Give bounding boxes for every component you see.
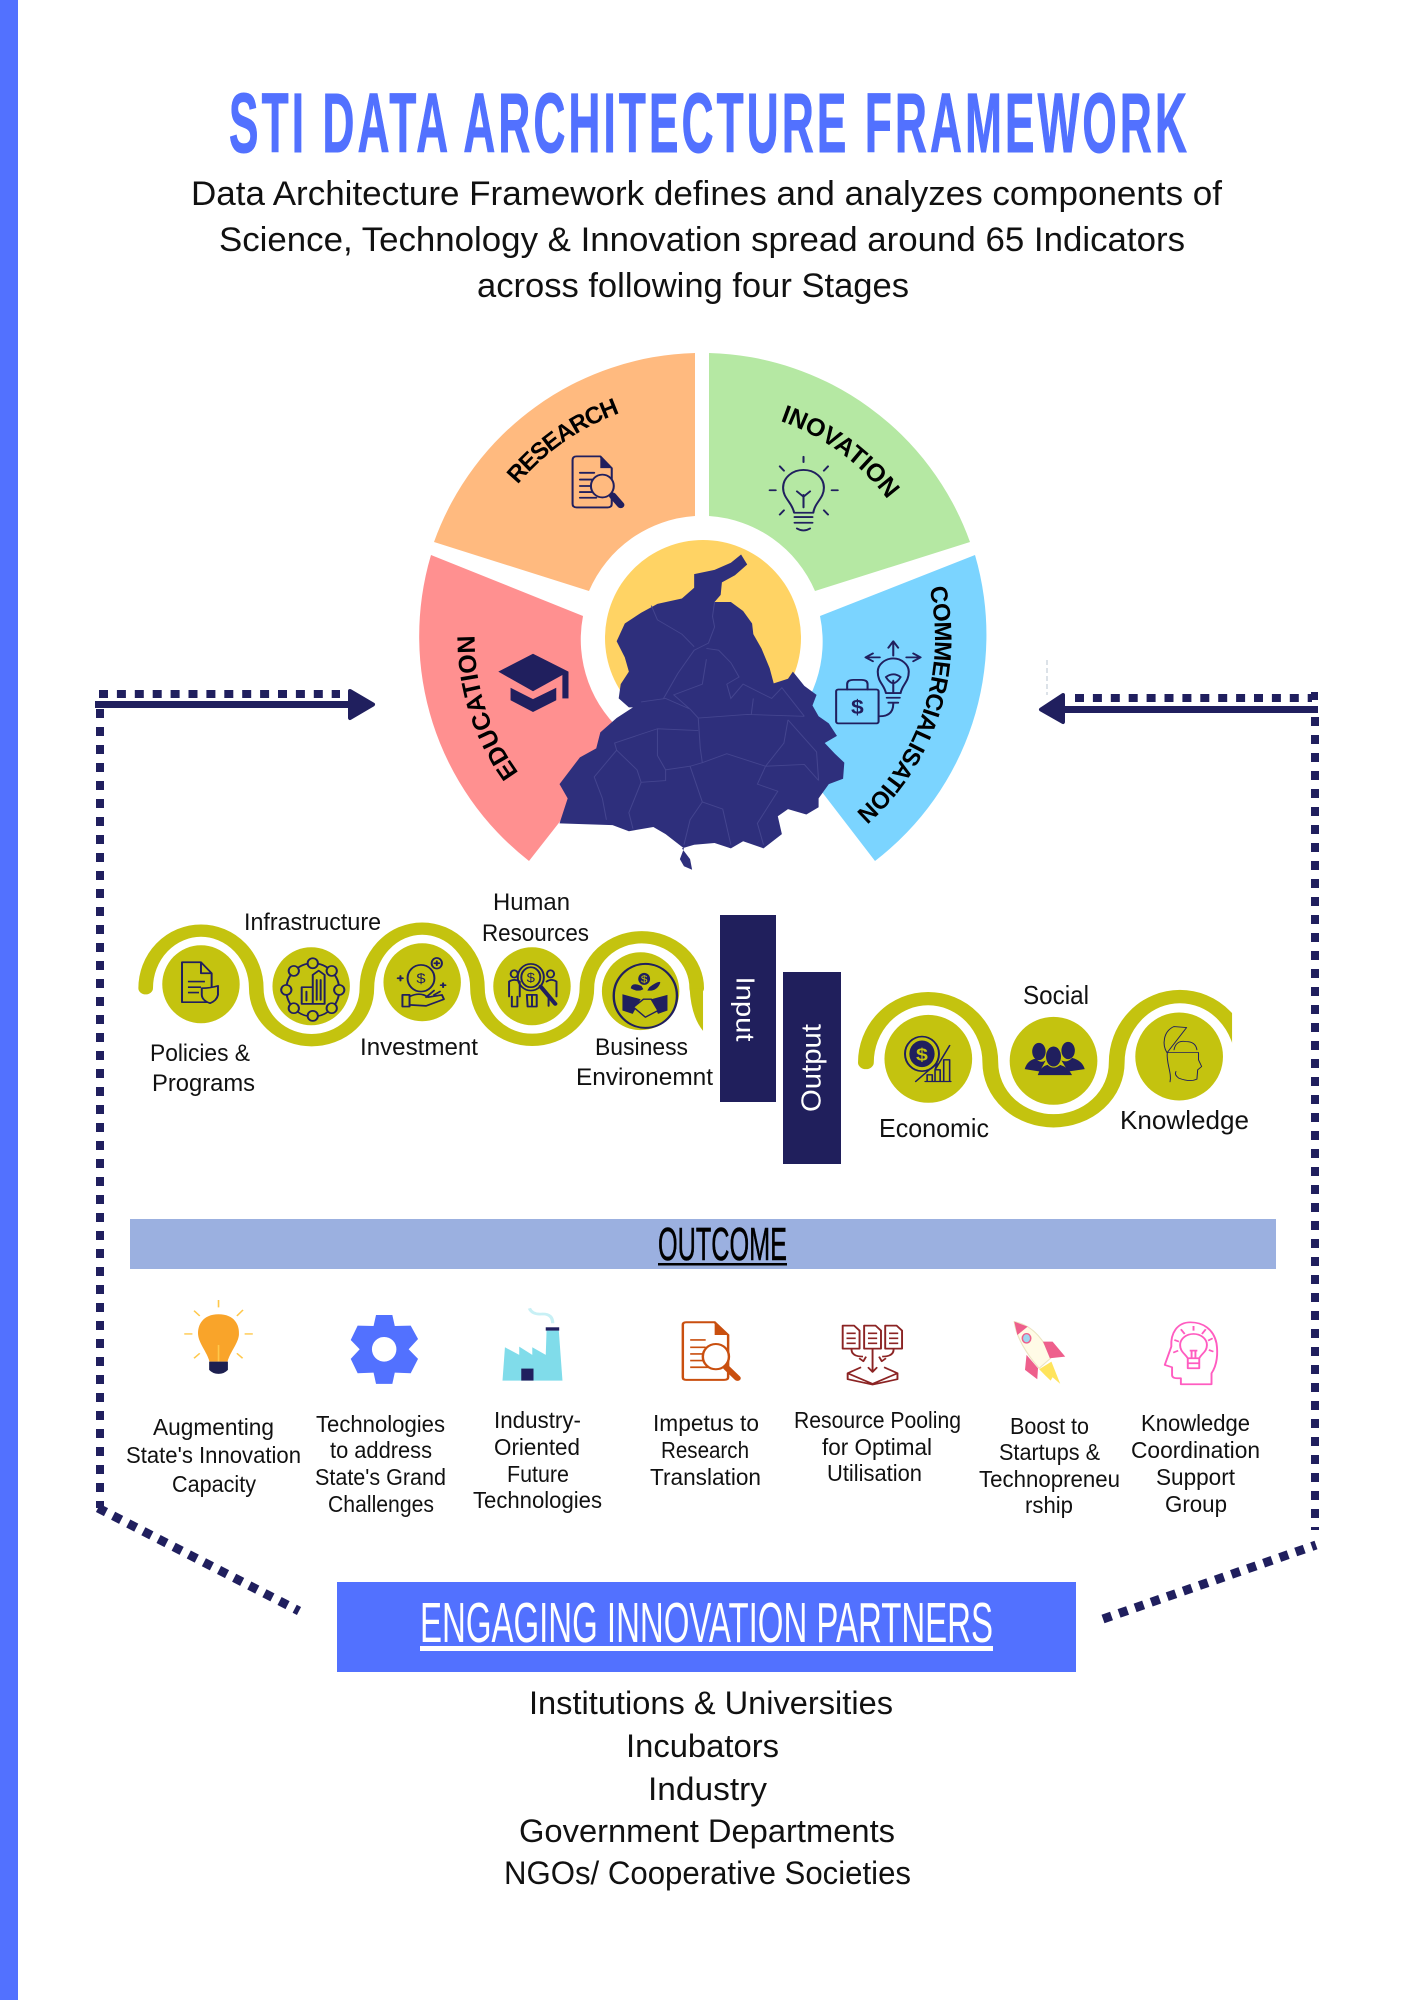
outcome: startups (979, 1413, 1120, 1518)
segment: commercialisation (779, 555, 986, 861)
outcome: industry-oriented technologies: Future (507, 1461, 569, 1487)
segment: research (434, 353, 695, 591)
outcome icon: knowledge head (1165, 1322, 1217, 1384)
partners list: Institutions & Universities (529, 1685, 893, 1721)
label: research: RESEARCH (506, 398, 618, 484)
circle: investment: $ (416, 971, 426, 987)
centre circle (605, 540, 801, 736)
output snake: wave and circles (866, 997, 1243, 1121)
outcome: technologies for challenges: State's Grand (315, 1464, 446, 1490)
input labels (150, 889, 713, 1097)
label: education: EDUCATION (457, 637, 518, 782)
icon: commercialisation briefcase and bulb (836, 641, 921, 723)
circle: investment (383, 943, 461, 1021)
outcome: technologies for challenges: Challenges (328, 1491, 434, 1517)
input tab (720, 915, 776, 1102)
outcome: technologies for challenges: to address (330, 1437, 432, 1463)
output labels (879, 980, 1249, 1143)
outcome: resource pooling: for Optimal (822, 1434, 932, 1460)
subtitle: Data Architecture Framework defines and analyzes components of (191, 175, 1223, 213)
outcome: resource pooling (794, 1407, 961, 1486)
outcome: research translation: Impetus to (653, 1410, 759, 1436)
output labels: Knowledge (1120, 1105, 1249, 1135)
outcome: knowledge coordination: Knowledge (1141, 1410, 1250, 1436)
outcome: resource pooling: Resource Pooling (794, 1407, 961, 1433)
outcome icon: gear (351, 1315, 418, 1384)
outcome icon: research document (683, 1322, 738, 1380)
circle: business environment (602, 952, 679, 1030)
outcome: industry-oriented technologies: Technologies (473, 1487, 602, 1513)
label: innovation: INOVATION (782, 405, 900, 498)
outcome: industry-oriented technologies (473, 1407, 602, 1513)
outcome icon: factory (502, 1308, 562, 1381)
left dotted connector with arrow (95, 691, 373, 1611)
outcome: knowledge coordination: Support (1156, 1464, 1236, 1490)
partners list: NGOs/ Cooperative Societies (504, 1855, 911, 1891)
outcome: startups: rship (1025, 1492, 1073, 1518)
input tab: Input (731, 976, 761, 1042)
outcome: research translation: Translation (650, 1464, 761, 1490)
outcome icon: resource pooling (843, 1326, 902, 1385)
outcome: research translation: Research (661, 1437, 749, 1463)
input labels: Resources (482, 920, 589, 947)
subtitle (191, 175, 1223, 305)
circle: infrastructure (272, 947, 350, 1025)
outcome: augmenting capacity: Augmenting (153, 1414, 274, 1440)
input labels: Business (595, 1034, 688, 1061)
input labels: Investment (360, 1034, 478, 1061)
input labels: Programs (152, 1070, 255, 1097)
outcome icon: rocket (1014, 1322, 1065, 1384)
partners banner (337, 1582, 1076, 1672)
input labels: Human (493, 889, 570, 916)
subtitle: across following four Stages (477, 267, 909, 305)
input labels: Environemnt (576, 1064, 713, 1091)
partners banner: ENGAGING INNOVATION PARTNERS (420, 1591, 993, 1655)
output labels: Economic (879, 1113, 989, 1143)
circle: human resources (493, 947, 571, 1025)
outcome: industry-oriented technologies: Oriented (494, 1434, 580, 1460)
outcome: startups: Startups & (999, 1439, 1100, 1465)
output labels: Social (1023, 980, 1089, 1010)
partners list: Government Departments (519, 1813, 895, 1849)
circle: economic (884, 1015, 972, 1103)
subtitle: Science, Technology & Innovation spread around 65 Indicators (219, 221, 1185, 259)
partners list: Incubators (626, 1728, 779, 1764)
label: commercialisation: COMMERCIALISATION (857, 586, 952, 824)
circle: policies (162, 945, 240, 1023)
outcome band: OUTCOME (658, 1218, 787, 1270)
output tab: Output (795, 1024, 826, 1112)
left accent bar (0, 0, 18, 2000)
circle: social (1010, 1017, 1097, 1105)
wave (866, 997, 1243, 1121)
wheel: four stages (419, 353, 986, 870)
outcome: startups: Boost to (1010, 1413, 1089, 1439)
output tab (783, 972, 841, 1164)
input snake: wave and circles (146, 929, 703, 1040)
outcome: technologies for challenges (315, 1411, 446, 1517)
wave (146, 929, 697, 1040)
outcome: augmenting capacity: State's Innovation (126, 1442, 301, 1468)
circle: knowledge (1135, 1013, 1223, 1100)
outcome: augmenting capacity (126, 1414, 301, 1497)
circle: human resources: $ (527, 970, 535, 985)
input labels: Policies & (150, 1040, 250, 1067)
partners list: Industry (648, 1771, 767, 1807)
circle: economic: $ (916, 1045, 928, 1065)
segment: education (419, 555, 627, 861)
outcome: industry-oriented technologies: Industry- (494, 1407, 581, 1433)
input labels: Infrastructure (244, 909, 381, 936)
outcome: resource pooling: Utilisation (827, 1460, 922, 1486)
outcome band (130, 1218, 1276, 1270)
outcome icon: bulb (184, 1300, 253, 1374)
outcome: knowledge coordination: Group (1165, 1491, 1227, 1517)
outcome: technologies for challenges: Technologies (316, 1411, 445, 1437)
partners list (504, 1685, 911, 1891)
segment: innovation (709, 353, 970, 591)
map of Punjab (560, 555, 844, 870)
icon: innovation bulb (770, 457, 838, 530)
outcome: knowledge coordination: Coordination (1131, 1437, 1260, 1463)
icon: education cap (498, 654, 568, 712)
circle: business environment: $ (641, 974, 647, 985)
outcome: research translation (650, 1410, 761, 1490)
outcome: knowledge coordination (1131, 1410, 1260, 1517)
wave tail (690, 988, 703, 1031)
outcome: augmenting capacity: Capacity (172, 1471, 256, 1497)
outcome: startups: Technopreneu (979, 1466, 1120, 1492)
icon: commercialisation briefcase and bulb: $ (851, 696, 864, 718)
icon: research document (573, 456, 621, 507)
right dotted connector with arrow (1041, 660, 1318, 1619)
